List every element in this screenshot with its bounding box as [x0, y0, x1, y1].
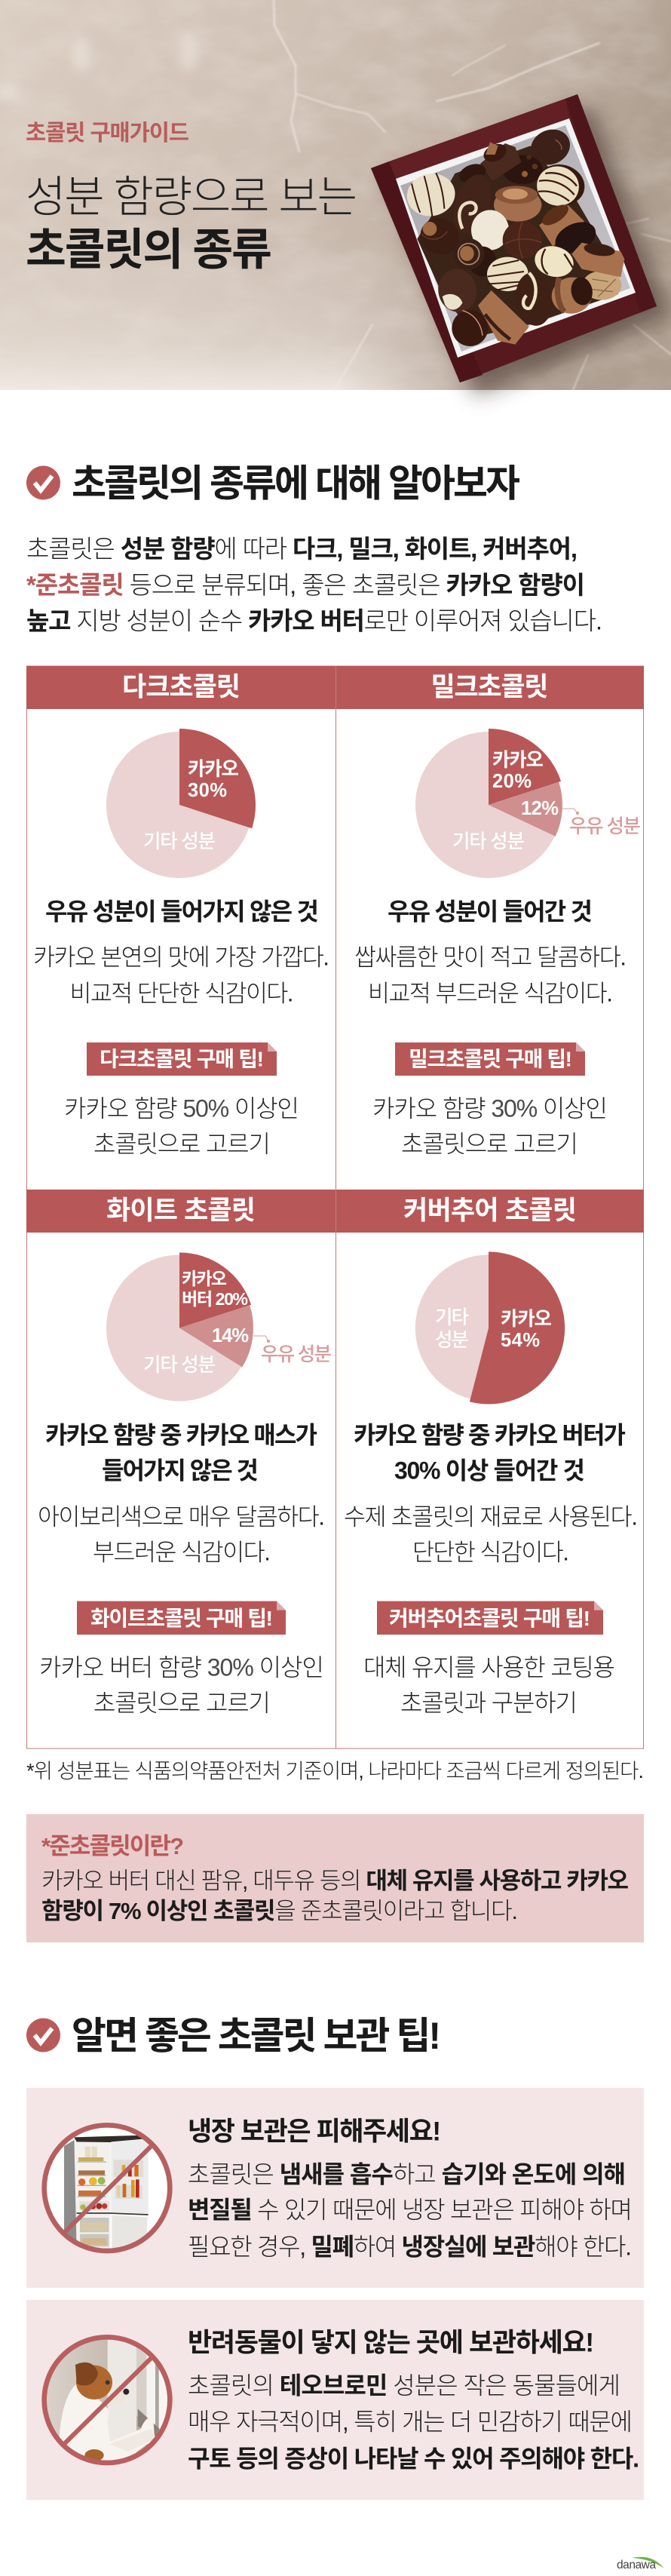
header: 밀크초콜릿	[431, 673, 549, 702]
description: 수제 초콜릿의 재료로 사용된다.	[344, 1503, 638, 1530]
panel text: 필요한 경우, 밀폐하여 냉장실에 보관해야 한다.	[188, 2233, 632, 2260]
description	[344, 1503, 638, 1566]
subheading	[354, 1421, 626, 1485]
pie chart: milk: 기타 성분	[452, 831, 525, 852]
tip text: 카카오 버터 함량 30% 이상인	[39, 1653, 324, 1681]
panel text: 변질될 수 있기 때문에 냉장 보관은 피해야 하며	[188, 2197, 633, 2224]
pie chart: couverture: 54%	[501, 1330, 540, 1351]
tip badge: 화이트초콜릿 구매 팁!	[90, 1607, 273, 1630]
tip badge: 다크초콜릿 구매 팁!	[100, 1047, 264, 1071]
footnote: *위 성분표는 식품의약품안전처 기준이며, 나라마다 조금씩 다르게 정의된다.	[26, 1759, 644, 1782]
title	[26, 173, 357, 275]
tip badge: 밀크초콜릿 구매 팁!	[409, 1047, 572, 1071]
panel: avoid refrigeration	[26, 2088, 644, 2288]
logo: danawa: danawa	[617, 2559, 656, 2571]
pie chart: dark	[106, 729, 256, 878]
tip text: 초콜릿으로 고르기	[401, 1130, 578, 1157]
label: chocolate buying guide: 초콜릿 구매가이드	[26, 121, 189, 146]
tip text	[372, 1095, 608, 1157]
chocolate box photo illustration	[371, 94, 671, 396]
pie chart: dark: 카카오	[188, 759, 239, 780]
pie chart: couverture: 카카오	[501, 1309, 552, 1330]
callout: what is compound chocolate: 카카오 버터 대신 팜유, 대두유 등의 대체 유지를 사용하고 카카오	[41, 1868, 629, 1894]
pie chart: white: 버터 20%	[182, 1289, 248, 1309]
pie chart: milk: 12%	[521, 798, 559, 819]
chocolates	[403, 123, 624, 346]
panel: white chocolate	[26, 1190, 336, 1717]
intro text block: 높고 지방 성분이 순수 카카오 버터로만 이루어져 있습니다.	[26, 606, 602, 635]
section heading: storage tips: 알면 좋은 초콜릿 보관 팁!	[72, 2015, 441, 2057]
tip text: 초콜릿으로 고르기	[93, 1130, 271, 1157]
pie chart: white: 우유 성분	[261, 1344, 332, 1365]
icon: prohibited dog	[40, 2333, 174, 2469]
pie chart: milk	[415, 729, 641, 878]
intro text block	[26, 535, 602, 635]
header	[336, 666, 644, 709]
hero banner	[0, 0, 671, 396]
icon: check circle	[26, 2019, 60, 2052]
pie chart: white: 기타 성분	[143, 1355, 216, 1376]
icon: prohibited refrigerator	[42, 2123, 172, 2253]
panel text: 초콜릿의 테오브로민 성분은 작은 동물들에게	[188, 2372, 620, 2399]
subheading	[45, 1421, 317, 1485]
tip text: 초콜릿과 구분하기	[400, 1690, 578, 1717]
callout: what is compound chocolate: *준초콜릿이란?	[41, 1833, 184, 1859]
pie chart: dark: 기타 성분	[143, 831, 216, 852]
panel text	[188, 2160, 633, 2260]
pie chart: milk: 우유 성분	[569, 816, 641, 837]
subheading: 우유 성분이 들어간 것	[388, 898, 593, 925]
tip badge	[87, 1042, 277, 1076]
callout: what is compound chocolate	[26, 1814, 644, 1942]
marble background	[0, 0, 671, 390]
pie chart: white: 카카오	[182, 1269, 227, 1288]
panel text: 구토 등의 증상이 나타날 수 있어 주의해야 한다.	[188, 2446, 639, 2473]
header	[26, 1190, 336, 1233]
pie chart: milk: 20%	[492, 771, 532, 792]
title: 성분 함량으로 보는	[26, 173, 357, 222]
header: 커버추어 초콜릿	[403, 1196, 577, 1225]
pie chart: white	[106, 1252, 332, 1402]
intro text block: *준초콜릿 등으로 분류되며, 좋은 초콜릿은 카카오 함량이	[26, 571, 585, 599]
description	[33, 943, 329, 1006]
description: 부드러운 식감이다.	[93, 1539, 271, 1566]
section heading: types of chocolate: 초콜릿의 종류에 대해 알아보자	[72, 462, 520, 505]
subheading: 카카오 함량 중 카카오 매스가	[45, 1421, 317, 1448]
icon: check circle	[26, 466, 60, 499]
callout: what is compound chocolate: 함량이 7% 이상인 초콜릿을 준초콜릿이라고 합니다.	[41, 1898, 518, 1924]
panel: keep away from pets	[26, 2300, 644, 2500]
tip badge	[377, 1601, 603, 1635]
tip text	[64, 1095, 299, 1157]
description: 비교적 단단한 식감이다.	[69, 979, 294, 1006]
subheading: 우유 성분이 들어가지 않은 것	[45, 898, 319, 925]
description: 카카오 본연의 맛에 가장 가깝다.	[33, 943, 329, 970]
panel title: 반려동물이 닿지 않는 곳에 보관하세요!	[188, 2328, 594, 2358]
tip badge	[77, 1601, 286, 1635]
subheading: 30% 이상 들어간 것	[394, 1457, 585, 1485]
subheading: 들어가지 않은 것	[102, 1457, 259, 1485]
pie chart: milk: 카카오	[492, 750, 544, 771]
description: 쌉싸름한 맛이 적고 달콤하다.	[354, 943, 627, 970]
pie chart: couverture	[415, 1252, 565, 1405]
tip badge	[395, 1042, 585, 1076]
header	[336, 1190, 644, 1233]
pie chart: white: 14%	[212, 1325, 249, 1346]
tip text: 카카오 함량 50% 이상인	[64, 1095, 299, 1122]
pie chart: couverture: 기타	[435, 1307, 469, 1328]
description	[38, 1503, 325, 1566]
table grid lines	[27, 666, 644, 1749]
header: 화이트 초콜릿	[106, 1196, 256, 1225]
description: 비교적 부드러운 식감이다.	[368, 979, 613, 1006]
description	[354, 943, 627, 1006]
pie chart: couverture: 성분	[435, 1330, 469, 1351]
pie chart: dark: 30%	[188, 780, 227, 801]
chocolate types table	[26, 666, 644, 1749]
header	[26, 666, 336, 709]
description: 아이보리색으로 매우 달콤하다.	[38, 1503, 325, 1530]
panel: couverture chocolate	[336, 1190, 644, 1717]
description: 단단한 식감이다.	[412, 1539, 569, 1566]
tip badge: 커버추어초콜릿 구매 팁!	[389, 1607, 590, 1630]
title: 초콜릿의 종류	[26, 226, 272, 275]
panel text: 매우 자극적이며, 특히 개는 더 민감하기 때문에	[188, 2408, 633, 2435]
panel text: 초콜릿은 냄새를 흡수하고 습기와 온도에 의해	[188, 2160, 626, 2188]
header: 다크초콜릿	[122, 673, 241, 702]
panel title: 냉장 보관은 피해주세요!	[188, 2117, 441, 2147]
panel: milk chocolate	[336, 666, 644, 1157]
panel: dark chocolate	[26, 666, 336, 1157]
tip text	[363, 1653, 615, 1717]
subheading: 카카오 함량 중 카카오 버터가	[354, 1421, 626, 1448]
panel text	[188, 2372, 639, 2473]
intro text block: 초콜릿은 성분 함량에 따라 다크, 밀크, 화이트, 커버추어,	[26, 535, 578, 563]
tip text	[39, 1653, 324, 1717]
tip text: 초콜릿으로 고르기	[93, 1690, 271, 1717]
tip text: 카카오 함량 30% 이상인	[372, 1095, 608, 1122]
tip text: 대체 유지를 사용한 코팅용	[363, 1653, 615, 1681]
